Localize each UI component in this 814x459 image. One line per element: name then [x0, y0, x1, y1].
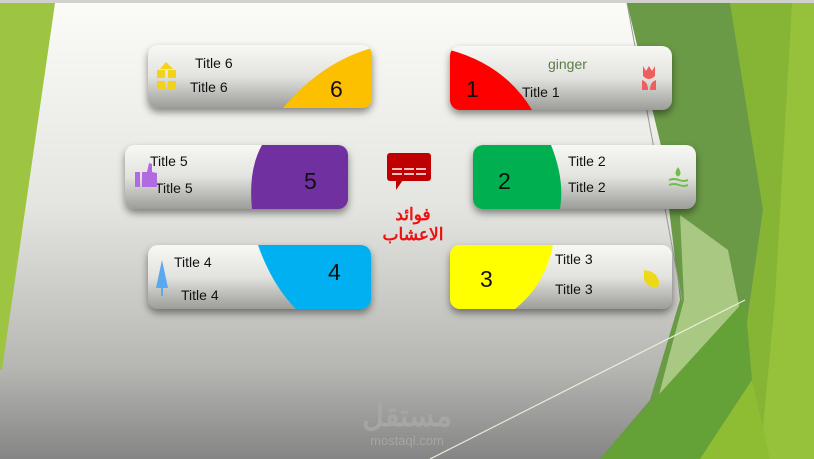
card 2: Title 2 — [568, 153, 606, 169]
card 5 — [125, 145, 348, 209]
card 5: Title 5 — [150, 153, 188, 169]
card 4: Title 4 — [174, 254, 212, 270]
icon: tree — [156, 260, 168, 296]
card 6: Title 6 — [195, 55, 233, 71]
card 2: 2 — [498, 168, 511, 194]
icon: water — [669, 168, 688, 186]
card 1: Title 1 — [522, 84, 560, 100]
card 6 — [148, 45, 372, 108]
center icon: speech bubble — [387, 153, 431, 190]
icon: tulip — [642, 66, 656, 90]
card 2: Title 2 — [568, 179, 606, 195]
card 3: Title 3 — [555, 251, 593, 267]
card 4 — [148, 245, 371, 309]
watermark — [362, 400, 452, 448]
center title: الاعشاب — [383, 225, 443, 244]
card 3 — [450, 245, 672, 309]
card 5: Title 5 — [155, 180, 193, 196]
card 2 — [473, 145, 696, 209]
icon: gift — [157, 62, 176, 90]
right green decoration — [430, 3, 814, 459]
icon: thumbs up — [135, 163, 157, 187]
card 6: 6 — [330, 76, 343, 102]
card 3: 3 — [480, 266, 493, 292]
card 3: Title 3 — [555, 281, 593, 297]
center title: فوائد — [395, 205, 431, 225]
card 1 — [450, 46, 672, 110]
card 1: ginger — [548, 56, 587, 72]
card 4: 4 — [328, 259, 341, 285]
watermark: mostaql.com — [370, 433, 444, 448]
center title — [383, 205, 443, 244]
left green wedge — [0, 3, 55, 370]
icon: leaf — [644, 270, 659, 287]
card 1: 1 — [466, 76, 479, 102]
watermark: مستقل — [362, 400, 452, 433]
card 6: Title 6 — [190, 79, 228, 95]
card 5: 5 — [304, 168, 317, 194]
card 4: Title 4 — [181, 287, 219, 303]
